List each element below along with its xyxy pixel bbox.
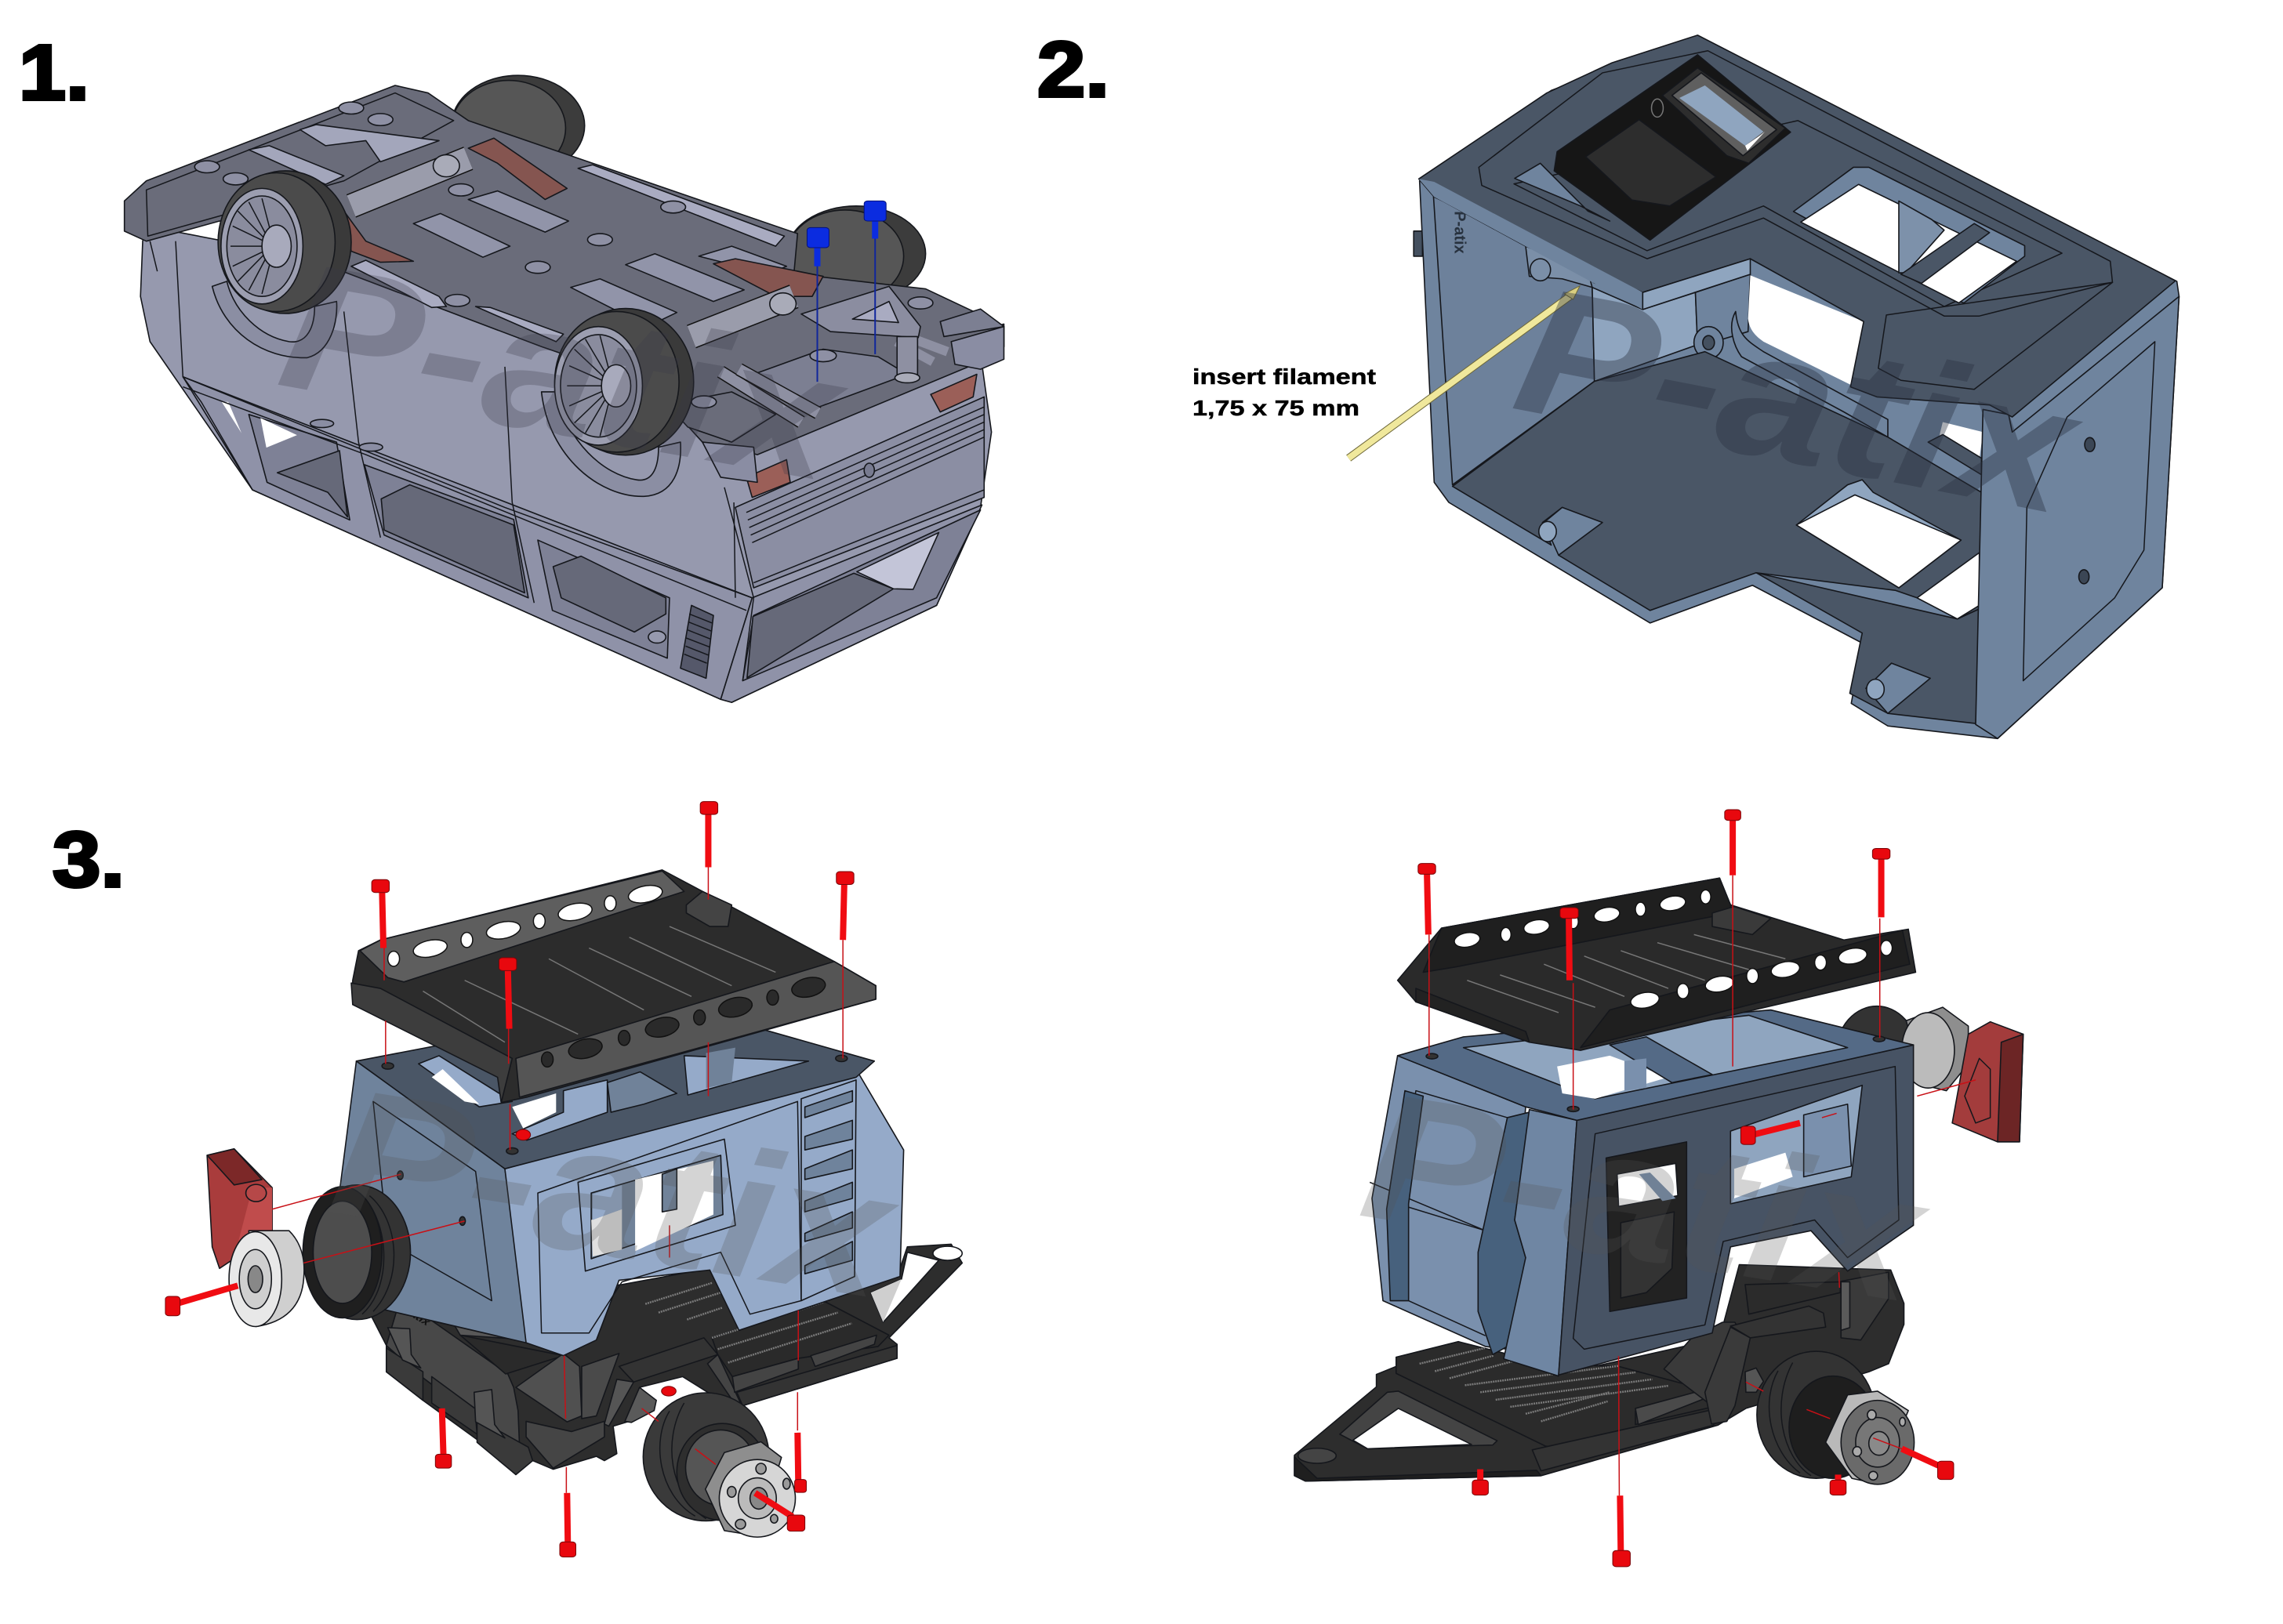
side window xyxy=(578,1139,735,1271)
floor xyxy=(1453,352,1981,619)
rear ear screws xyxy=(1414,231,1422,256)
middle block xyxy=(516,1354,582,1422)
watermark panel 3: P-atix xyxy=(319,1050,910,1338)
tow triangle opening xyxy=(1340,1391,1497,1448)
van body xyxy=(140,226,1004,702)
body lines xyxy=(150,241,753,681)
engraved text: P-atix xyxy=(1450,211,1468,254)
deck slab xyxy=(1396,1342,1718,1447)
door xyxy=(1606,1142,1686,1311)
side window middle xyxy=(365,465,528,598)
rear hidden wheel left xyxy=(452,75,585,176)
wheel front left xyxy=(218,171,351,314)
camper body xyxy=(336,1002,904,1356)
trailer chassis xyxy=(372,1244,962,1474)
steering arm and tubes xyxy=(720,286,948,422)
jerry can xyxy=(207,1149,272,1268)
red lights xyxy=(746,460,790,498)
back structure xyxy=(1664,1322,1744,1411)
watermark panel 1: P-atix xyxy=(267,224,861,520)
rectangular cutouts xyxy=(413,213,510,257)
mount holes xyxy=(194,102,933,408)
red screws xyxy=(165,802,854,1557)
roof rack xyxy=(351,870,876,1103)
side window front xyxy=(538,540,670,658)
step number 1: 1. xyxy=(19,29,89,117)
trailer chassis xyxy=(1294,1264,1904,1481)
floor windows xyxy=(1796,480,1980,619)
back opening rear bits xyxy=(1928,422,1983,475)
filament caption: insert filament xyxy=(1192,364,1376,389)
right side wall xyxy=(1976,296,2179,738)
left wall inside xyxy=(1433,196,1602,485)
floor mounts xyxy=(1539,507,1930,713)
roof rack xyxy=(1398,878,1915,1050)
panel 4: trailer exploded view right xyxy=(1294,810,2023,1567)
deck xyxy=(712,1301,889,1376)
rear bumper panel with grill xyxy=(735,397,984,588)
hitch top xyxy=(619,1338,718,1382)
back tire and bearing xyxy=(1837,1006,1969,1098)
side window rear xyxy=(222,402,350,520)
filament caption: 1,75 x 75 mm xyxy=(1192,396,1359,420)
outboard face xyxy=(401,1299,508,1339)
top face xyxy=(1419,35,2176,417)
panel 1: upside-down van with chassis xyxy=(125,75,1004,702)
wheel xyxy=(1757,1351,1915,1484)
wheel arch left xyxy=(212,281,337,357)
side window xyxy=(1730,1086,1862,1204)
step number 3: 3. xyxy=(53,816,125,904)
top window xyxy=(1794,167,2024,303)
rear hidden wheel right xyxy=(786,206,926,303)
rear window xyxy=(742,510,981,681)
cab silhouette xyxy=(1420,36,2179,738)
jerry can xyxy=(1952,1022,2023,1142)
panel 3: trailer exploded view left xyxy=(165,802,962,1557)
blue screws xyxy=(807,201,886,382)
A cutouts xyxy=(300,125,439,161)
trailer chassis: P-atix xyxy=(397,1303,434,1328)
watermark panel 4: P-atix xyxy=(1350,1054,1941,1342)
wheel front right xyxy=(554,309,694,455)
rear plate cutout xyxy=(753,349,907,409)
camper body xyxy=(1370,1010,1914,1376)
door handles xyxy=(310,419,334,427)
red screws xyxy=(1418,810,1976,1567)
side boxes xyxy=(387,1348,423,1401)
filament rod xyxy=(1348,286,1580,459)
front axle and arms xyxy=(344,138,567,263)
top slab xyxy=(460,1335,564,1374)
black cab window insert xyxy=(1515,55,1791,240)
panel 2: cab shell with filament xyxy=(1348,35,2179,738)
filament caption xyxy=(1192,364,1376,420)
watermark panel 2: P-atix xyxy=(1502,248,2096,554)
step number 2: 2. xyxy=(1037,26,1109,114)
top openings xyxy=(419,1056,512,1107)
back wall xyxy=(1592,274,1888,437)
deck slots xyxy=(1420,1348,1668,1421)
left bearing hub xyxy=(229,1231,304,1326)
rear axle and arm xyxy=(691,259,823,336)
left spare wheel xyxy=(303,1185,411,1320)
right front wheel xyxy=(643,1393,795,1537)
ladder xyxy=(801,1080,856,1301)
deck slots xyxy=(645,1283,851,1363)
wheel arch right xyxy=(542,392,681,496)
chassis plate xyxy=(125,85,1004,482)
rear corner bumper xyxy=(667,392,775,442)
side vent xyxy=(681,605,713,678)
